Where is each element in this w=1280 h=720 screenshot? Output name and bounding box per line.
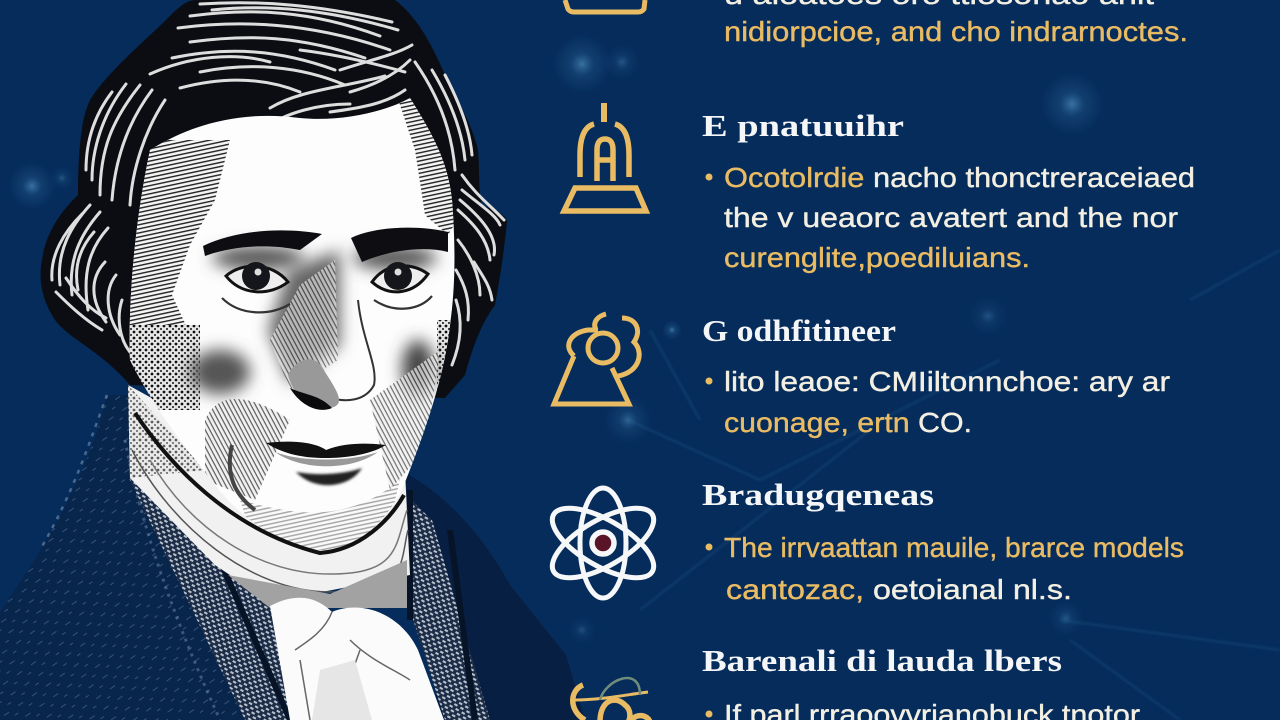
section: heading and bullets 3: cantozac, oetoianal nl.s. [726, 574, 1072, 605]
section: heading and bullets 1: curenglite,poediluians. [724, 242, 1030, 273]
hair mass [41, 0, 507, 398]
section: heading and bullets 3 [702, 477, 1184, 605]
waistcoat left [129, 478, 335, 720]
section: heading and bullets 2: G odhfitineer [702, 313, 896, 348]
jacket [0, 395, 585, 720]
icon: bell jar [564, 103, 646, 211]
high collar and shirt [128, 385, 410, 608]
section: heading and bullets 4: Barenali di lauda lbers [702, 643, 1062, 678]
eye right [372, 262, 432, 309]
section: heading and bullets 1: the v ueaorc avatert and the nor [724, 202, 1178, 233]
section: heading and bullets 1 [702, 108, 1195, 273]
icon: partial top flask base [565, 0, 645, 12]
icon: swirling orbit [573, 678, 650, 720]
waistcoat right [407, 496, 490, 720]
section: heading and bullets 1: E pnatuuihr [702, 108, 904, 143]
lapel dark edges [222, 490, 475, 720]
eye left [222, 262, 290, 312]
section: heading and bullets 2: cuonage, ertn CO. [724, 407, 972, 438]
section: heading and bullets 2 [702, 313, 1170, 438]
cravat [270, 598, 444, 720]
section: heading and bullets 2: lito leaoe: CMIiltonnchoe: ary ar [724, 366, 1170, 397]
section: heading and bullets 1: Ocotolrdie nacho thonctreraceiaed [724, 162, 1195, 193]
section: heading and bullets 3: The irrvaattan mauile, brarce models [724, 532, 1184, 563]
text block: intro fragment: nidiorpcioe, and cho indrarnoctes. [724, 16, 1188, 47]
icon: atom [542, 488, 664, 598]
text block: intro fragment [724, 0, 1188, 47]
section: heading and bullets 3: Bradugqeneas [702, 477, 934, 512]
eyebrows [203, 230, 322, 256]
section: heading and bullets 4 [702, 643, 1140, 720]
face [120, 90, 467, 560]
mouth [230, 442, 386, 510]
jaw shadow line [135, 413, 404, 553]
nose [288, 300, 375, 410]
icon: cooling tower with clouds [554, 314, 639, 404]
